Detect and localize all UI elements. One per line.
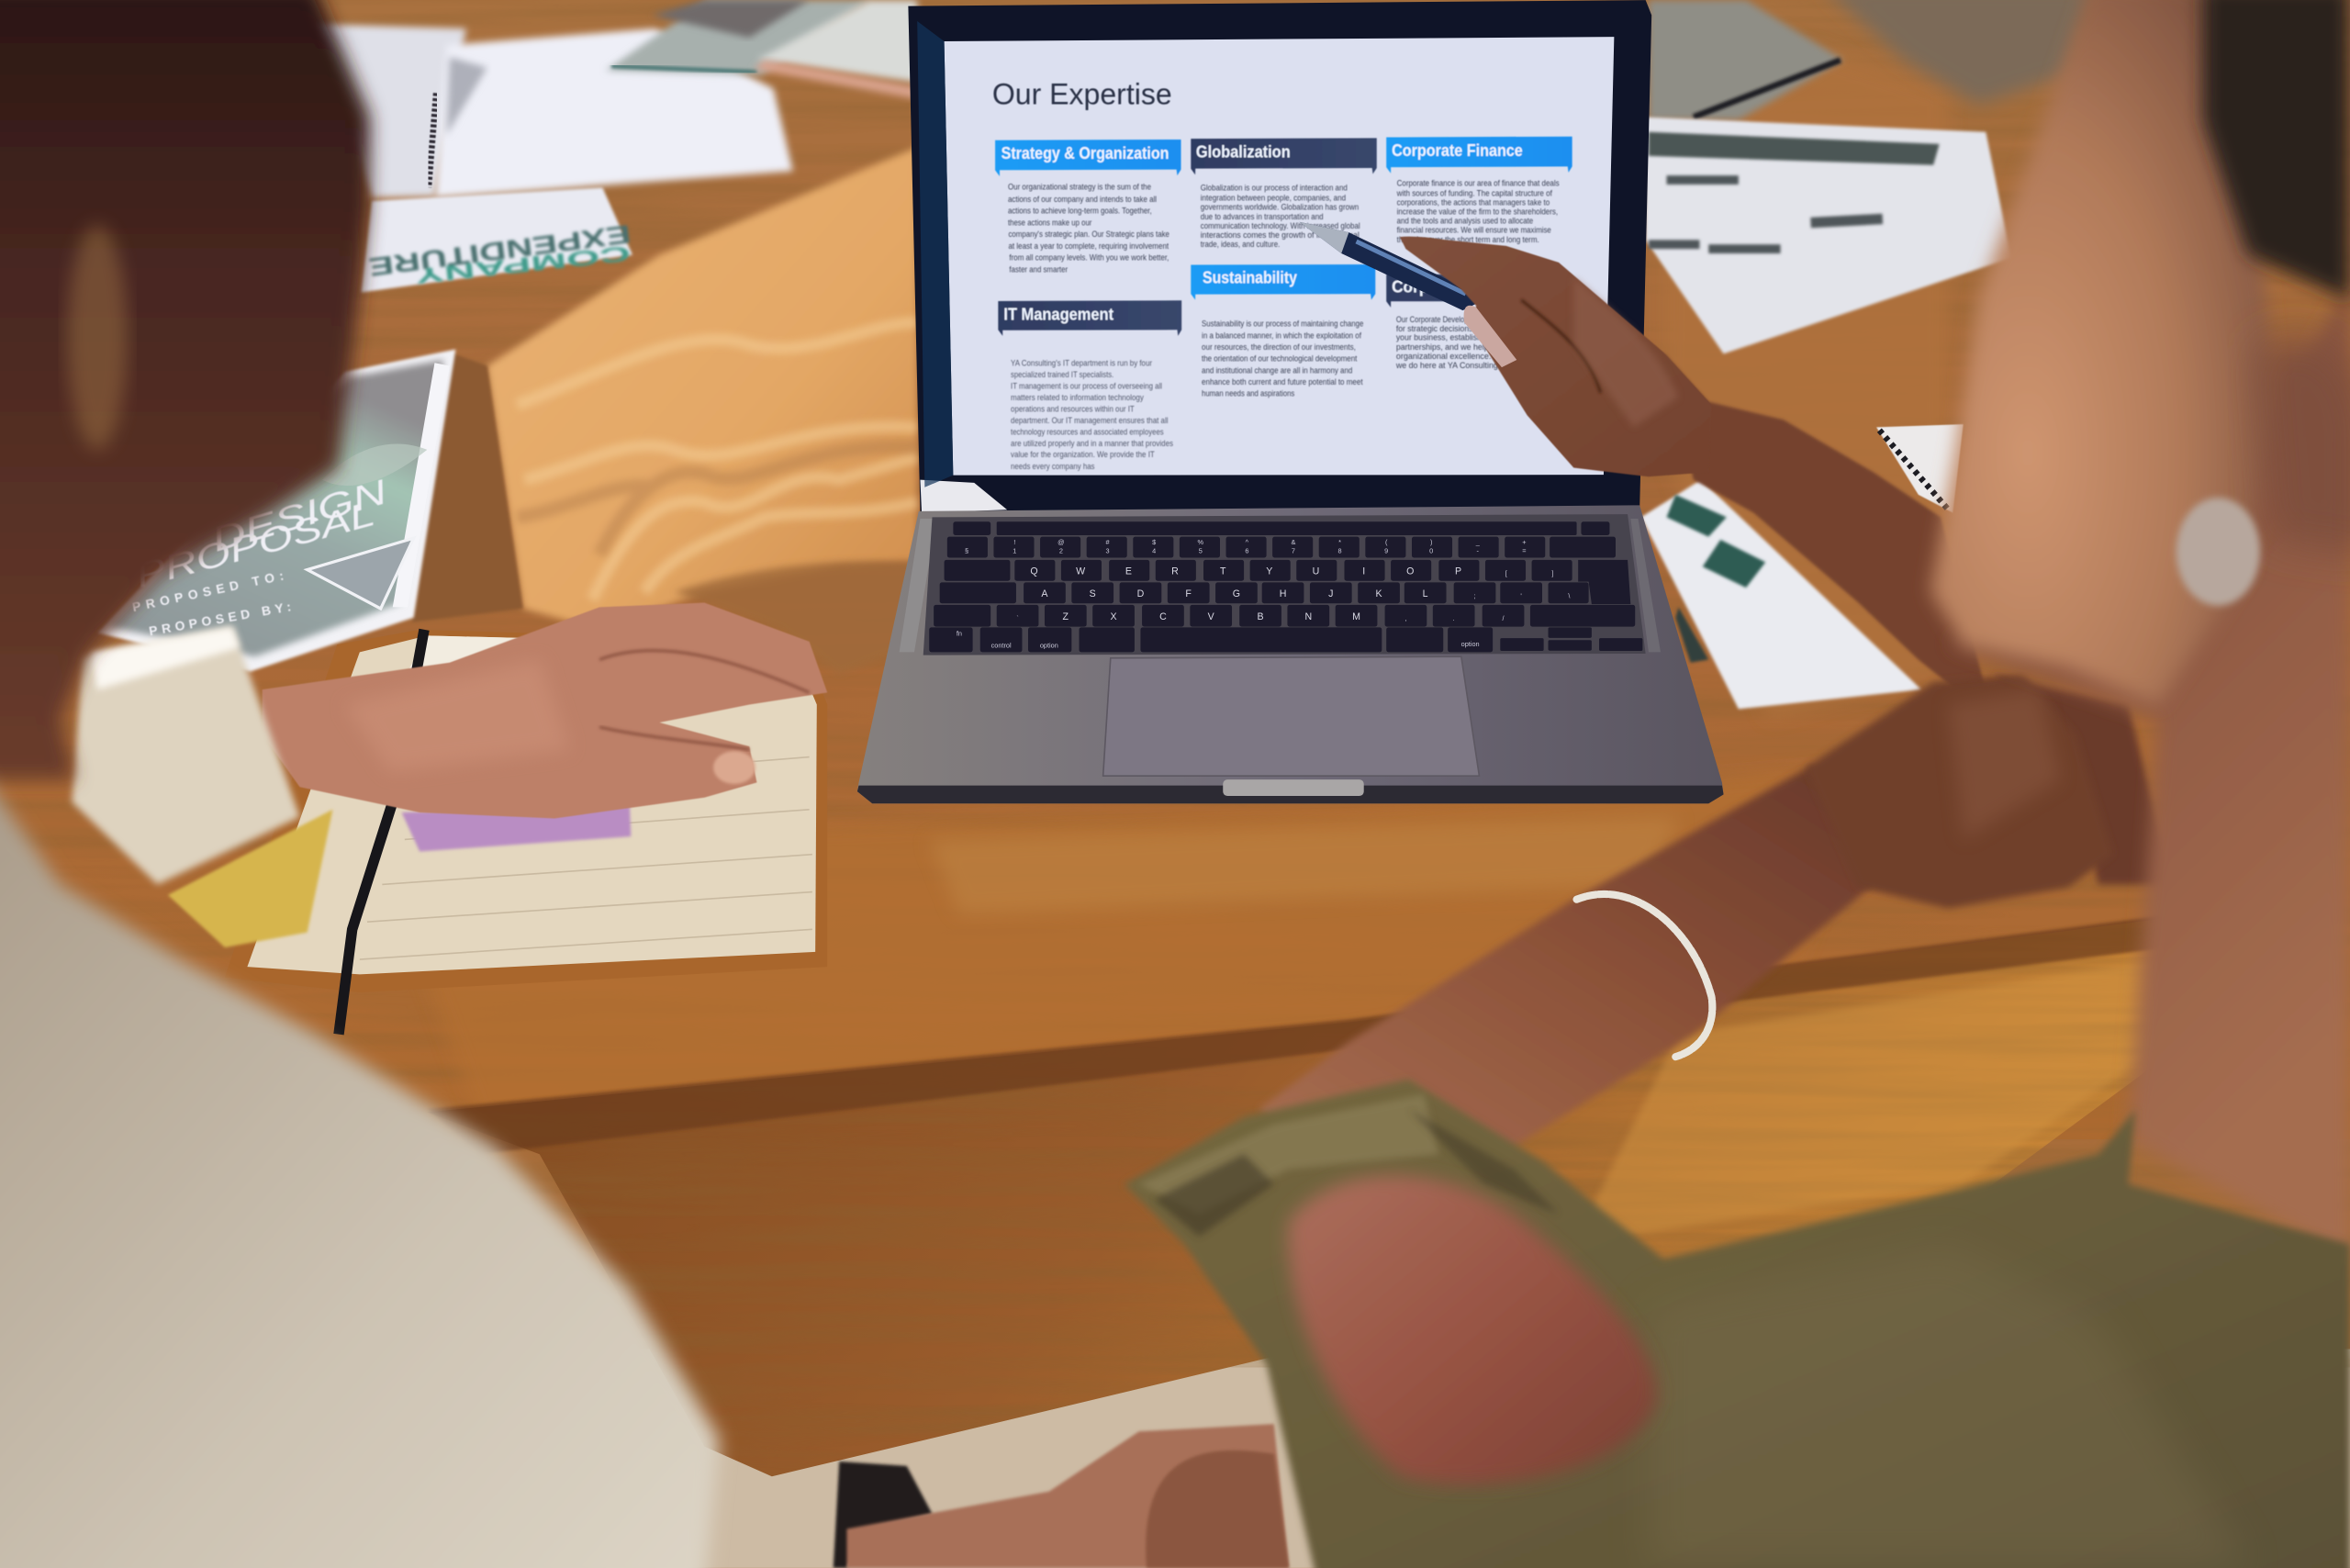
text: globalization body [1201,184,1360,249]
ASDF row: ' [1520,592,1522,600]
text: corporate finance body: financial resources. We will ensure we maximise [1397,226,1551,235]
pen [1300,222,1487,310]
ASDF row: K [1376,588,1382,599]
right person's ear and dark hair [2203,0,2350,554]
laptop screen lid [908,0,1651,512]
ASDF row: S [1090,588,1096,599]
ASDF row: A [1041,588,1048,599]
number row: @ [1058,538,1065,546]
text: IT management body [1011,358,1173,471]
text: IT management body: IT management is our process of overseeing all [1011,381,1162,390]
skin behind resting hand [1993,675,2173,884]
ZXCV row: B [1258,611,1264,622]
ZXCV row: Z [1063,611,1069,622]
QWERTY row: W [1076,566,1085,577]
ASDF row: L [1423,588,1428,599]
text: corporate finance body: corporations, the actions that managers take to [1397,197,1550,207]
ASDF row: \ [1568,592,1571,600]
text: globalization body: communication technology. With increased global [1201,221,1360,230]
number row: 4 [1152,547,1156,555]
ribbon: Sustainability [1191,264,1375,300]
number row: 8 [1338,547,1342,555]
QWERTY row: I [1362,566,1365,577]
modifier row: control [991,641,1012,649]
number row: 7 [1292,547,1295,555]
text: corporate development body [1395,315,1546,370]
slide content [992,77,1572,471]
number row: ^ [1246,538,1249,546]
text: corporate finance body: the value over the short term and long term. [1397,235,1539,244]
left person's head [0,0,370,779]
spiral notepad top right [1649,0,1843,120]
ZXCV row: N [1304,611,1312,622]
right person's resting forearm and hand [1259,675,2113,1154]
text: globalization body: interactions comes the growth of international [1201,230,1360,240]
text: sustainability body: and institutional change are all in harmony and [1202,365,1352,375]
modifier row: fn [957,629,962,637]
table front face [420,900,2188,1499]
left person's shirt cuff [72,627,300,884]
text: IT management body: YA Consulting's IT department is run by four [1011,358,1152,367]
modifier row [929,627,1642,652]
ZXCV row: / [1503,614,1505,622]
text: strategy body: faster and smarter [1009,265,1068,274]
text: sustainability body: our resources, the direction of our investments, [1202,342,1356,352]
text: corporate finance body: Corporate finance is our area of finance that deals [1397,179,1560,188]
right person's bent elbow [1288,1176,1657,1484]
QWERTY row: Q [1030,566,1038,577]
text: IT management body: department. Our IT management ensures that all [1011,416,1168,425]
text: corporate development body: for strategic decisions that help you grow [1396,324,1540,333]
number row: ! [1013,538,1015,546]
ribbon: Globalization [1191,138,1377,174]
number row: & [1292,538,1296,546]
company expenditure leaflet [361,187,632,292]
text: corporate development body: your business, establish new strategic [1396,333,1531,342]
hand [1400,237,1711,476]
ZXCV row: ` [1016,614,1019,622]
floor below table [0,1350,2350,1568]
number row: 9 [1384,547,1388,555]
QWERTY row: P [1455,566,1461,577]
spiral notebook [313,24,466,198]
chart sheet under laptop [1641,480,1921,709]
bracelet [1577,894,1712,1057]
number row: _ [1475,538,1481,546]
ZXCV row: . [1453,614,1455,622]
paper seen behind hinge [920,480,1007,512]
number row: ) [1430,538,1432,546]
text: corporate finance body: and the tools and analysis used to allocate [1397,216,1533,225]
papers top left [313,0,917,198]
text: strategy body: actions to achieve long-term goals. Together, [1008,207,1152,216]
ZXCV row: , [1404,614,1406,622]
notebook on table [168,630,827,1035]
ribbon: Corporate Development [1386,274,1572,308]
right person's neck [1948,285,2350,1260]
display [945,37,1614,476]
papers right of laptop [1641,0,2011,709]
text: globalization body: integration between people, companies, and [1201,193,1346,202]
speaker grille left [900,519,936,652]
speaker grille right [1630,519,1661,652]
text: strategy body: company's strategic plan. Our Strategic plans take [1008,230,1169,239]
ribbon: Corporate Development: Corporate Development [1392,276,1572,296]
text: corporate development body: partnerships, and we help you achieve [1396,342,1534,352]
number row: + [1522,538,1527,546]
ribbon: Globalization: Globalization [1196,142,1291,162]
text: strategy body: from all company levels. With you we work better, [1009,253,1169,263]
sticky note yellow [168,810,332,947]
number row: $ [1152,538,1156,546]
number row: § [965,547,968,555]
design proposal booklet: PROPOSAL [131,494,379,595]
ribbon: Corporate Finance: Corporate Finance [1392,140,1523,160]
ZXCV row: C [1159,611,1167,622]
slide content: Our Expertise [992,77,1172,111]
laptop [857,0,1724,803]
number row: 3 [1105,547,1110,555]
text: IT management body: specialized trained IT specialists. [1011,370,1113,379]
small spiral pad [1876,424,1964,512]
text: globalization body: Globalization is our process of interaction and [1201,184,1348,193]
text: sustainability body: human needs and aspirations [1202,389,1295,398]
text: IT management body: technology resources and associated employees [1011,428,1164,437]
hinge latch [1223,779,1364,796]
number row: 6 [1245,547,1248,555]
text: strategy body: at least a year to complete, requiring involvement [1008,241,1169,251]
number row: 2 [1059,547,1063,555]
ZXCV row: V [1208,611,1215,622]
number row: - [1477,547,1480,555]
silver earring [2177,498,2260,606]
shadow near notebook hand [675,561,917,675]
QWERTY row: O [1406,566,1414,577]
text: corporate finance body [1396,179,1560,244]
left person's hand [263,602,827,819]
QWERTY row: [ [1505,569,1507,577]
text: sustainability body: in a balanced manner, in which the exploitation of [1202,330,1361,340]
text: sustainability body [1202,319,1363,398]
text: strategy body [1008,183,1169,274]
number row: ( [1385,538,1388,546]
number row: = [1522,547,1527,555]
text: IT management body: matters related to information technology [1011,393,1144,402]
right person's olive shirt [1124,1080,2350,1568]
text: globalization body: governments worldwide. Globalization has grown [1201,202,1359,211]
design proposal booklet: PROPOSED BY: [148,599,292,638]
number row: % [1197,538,1203,546]
text: IT management body: operations and resources within our IT [1011,405,1135,414]
pointing hand, pen and raised forearm [1300,222,1993,720]
QWERTY row: E [1125,566,1132,577]
text: sustainability body: the orientation of our technological development [1202,354,1358,364]
left person's earring glow [67,225,128,450]
base front lip [857,786,1724,803]
stacked documents [606,0,872,75]
QWERTY row: T [1220,566,1226,577]
number row: 0 [1429,547,1433,555]
QWERTY row: U [1313,566,1319,577]
ZXCV row [934,605,1635,627]
ribbon: Strategy & Organization [995,140,1181,176]
modifier row: option [1461,640,1480,648]
touch bar row [953,521,1609,535]
design proposal booklet: PROPOSED TO: [131,568,285,614]
ribbon: IT Management [998,300,1181,336]
forearm [1663,353,1993,720]
text: strategy body: actions of our company and intends to take all [1008,195,1157,204]
ZXCV row: X [1111,611,1117,622]
leg and shoe under table [834,1424,1289,1568]
text: sustainability body: enhance both current and future potential to meet [1202,377,1363,386]
ASDF row: J [1328,588,1333,599]
company expenditure leaflet: COMPANY [414,241,632,289]
keyboard [923,514,1646,655]
text: globalization body: trade, ideas, and culture. [1201,240,1280,249]
org chart document [1646,117,2011,353]
QWERTY row [945,560,1630,604]
text: strategy body: Our organizational strategy is the sum of the [1008,183,1151,192]
right person's face [1930,0,2278,704]
left person's shoulder [0,757,720,1568]
QWERTY row: Y [1266,566,1272,577]
text: corporate development body: we do here at YA Consulting [1395,361,1498,370]
ASDF row [940,582,1589,603]
ASDF row: ; [1474,592,1476,600]
text: corporate finance body: increase the value of the firm to the shareholders, [1397,207,1558,216]
text: IT management body: value for the organization. We provide the IT [1011,450,1155,459]
ribbon: Sustainability: Sustainability [1203,268,1297,287]
sunlit wood patch with wavy grain [487,147,917,630]
text: corporate development body: Our Corporate Development team is responsible [1396,315,1546,324]
ribbon: Strategy & Organization: Strategy & Organization [1002,143,1169,162]
ribbon: Corporate Finance [1386,137,1572,174]
number row: * [1338,538,1341,546]
text: strategy body: these actions make up our [1008,218,1091,227]
right person's hair top [1821,0,2098,105]
text: IT management body: needs every company has [1011,462,1095,471]
elastic band [339,630,424,1035]
sticky note purple [402,802,631,851]
ASDF row: D [1137,588,1145,599]
text: corporate development body: organizational excellence. This is what [1396,352,1538,361]
modifier row: option [1040,641,1058,649]
ribbon: IT Management: IT Management [1003,304,1114,323]
laptop base [857,505,1724,803]
QWERTY row: R [1171,566,1179,577]
company expenditure leaflet: EXPENDITURE [367,219,632,282]
QWERTY row: ] [1551,569,1553,577]
design proposal booklet: DESIGN [207,472,392,559]
number row: 5 [1199,547,1203,555]
table top wood [0,0,2350,1139]
design proposal booklet [97,350,455,672]
text: corporate finance body: with sources of funding. The capital structure of [1396,188,1552,197]
number row [947,537,1616,557]
shadow behind design proposal [412,353,523,622]
text: IT management body: are utilized properly and in a manner that provides [1011,439,1173,448]
large white sheet [434,28,793,198]
text: sustainability body: Sustainability is our process of maintaining change [1202,319,1363,329]
number row: 1 [1013,547,1016,555]
ZXCV row: M [1352,611,1360,622]
ASDF row: F [1185,588,1192,599]
text: globalization body: due to advances in transportation and [1201,212,1324,221]
ASDF row: H [1280,588,1286,599]
ASDF row: G [1233,588,1240,599]
trackpad [1103,656,1479,776]
number row: # [1105,538,1110,546]
